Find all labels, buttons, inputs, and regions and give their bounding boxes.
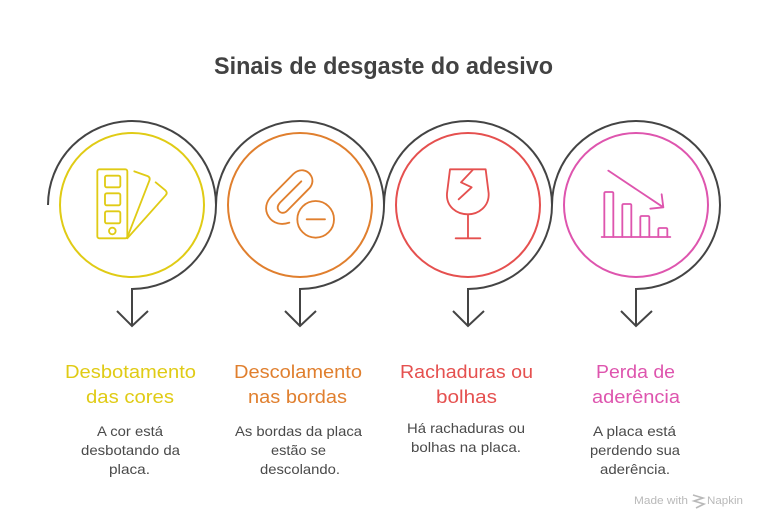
- description 1: desbotando da: [81, 442, 180, 458]
- description 1: A cor está: [97, 423, 163, 439]
- description 1: placa.: [109, 461, 150, 477]
- description 3: Há rachaduras ou: [407, 420, 525, 436]
- step 3: Rachaduras ou bolhas: [384, 121, 552, 455]
- connector arc and arrow 1: [48, 121, 216, 326]
- heading 4: Perda de: [596, 362, 675, 382]
- description 3: bolhas na placa.: [411, 439, 521, 455]
- heading 3: bolhas: [436, 387, 497, 407]
- heading 1: das cores: [86, 387, 174, 407]
- icon: colour swatch fan: [97, 169, 167, 238]
- icon: Napkin logo: [693, 495, 704, 508]
- circle 2: [228, 133, 372, 277]
- heading 4: [592, 362, 681, 407]
- icon: declining bar chart: [602, 171, 670, 237]
- connector arc and arrow 4: [552, 121, 720, 326]
- step 1: Desbotamento das cores: [48, 121, 216, 477]
- description 2: [235, 423, 362, 477]
- heading 3: [400, 362, 533, 407]
- description 2: estão se: [271, 442, 326, 458]
- circle 1: [60, 133, 204, 277]
- description 4: A placa está: [593, 423, 676, 439]
- watermark: Made with Napkin: [634, 495, 743, 508]
- heading 4: aderência: [592, 387, 681, 407]
- step 4: Perda de aderência: [552, 121, 720, 477]
- description 4: perdendo sua: [590, 442, 680, 458]
- title: Sinais de desgaste do adesivo: [214, 53, 553, 80]
- description 2: descolando.: [260, 461, 340, 477]
- description 4: aderência.: [600, 461, 670, 477]
- description 4: [590, 423, 680, 477]
- connector arc and arrow 3: [384, 121, 552, 326]
- icon: cracked glass: [447, 169, 489, 238]
- description 1: [81, 423, 180, 477]
- circle 3: [396, 133, 540, 277]
- circle 4: [564, 133, 708, 277]
- heading 3: Rachaduras ou: [400, 362, 533, 382]
- description 3: [407, 420, 525, 455]
- heading 2: [234, 362, 362, 407]
- heading 2: Descolamento: [234, 362, 362, 382]
- heading 2: nas bordas: [248, 387, 347, 407]
- description 2: As bordas da placa: [235, 423, 362, 439]
- heading 1: [65, 362, 196, 407]
- watermark: Made with Napkin: Napkin: [707, 495, 743, 507]
- step 2: Descolamento nas bordas: [216, 121, 384, 477]
- watermark: Made with Napkin: Made with: [634, 495, 688, 507]
- heading 1: Desbotamento: [65, 362, 196, 382]
- icon: paperclip with minus: [266, 170, 334, 238]
- connector arc and arrow 2: [216, 121, 384, 326]
